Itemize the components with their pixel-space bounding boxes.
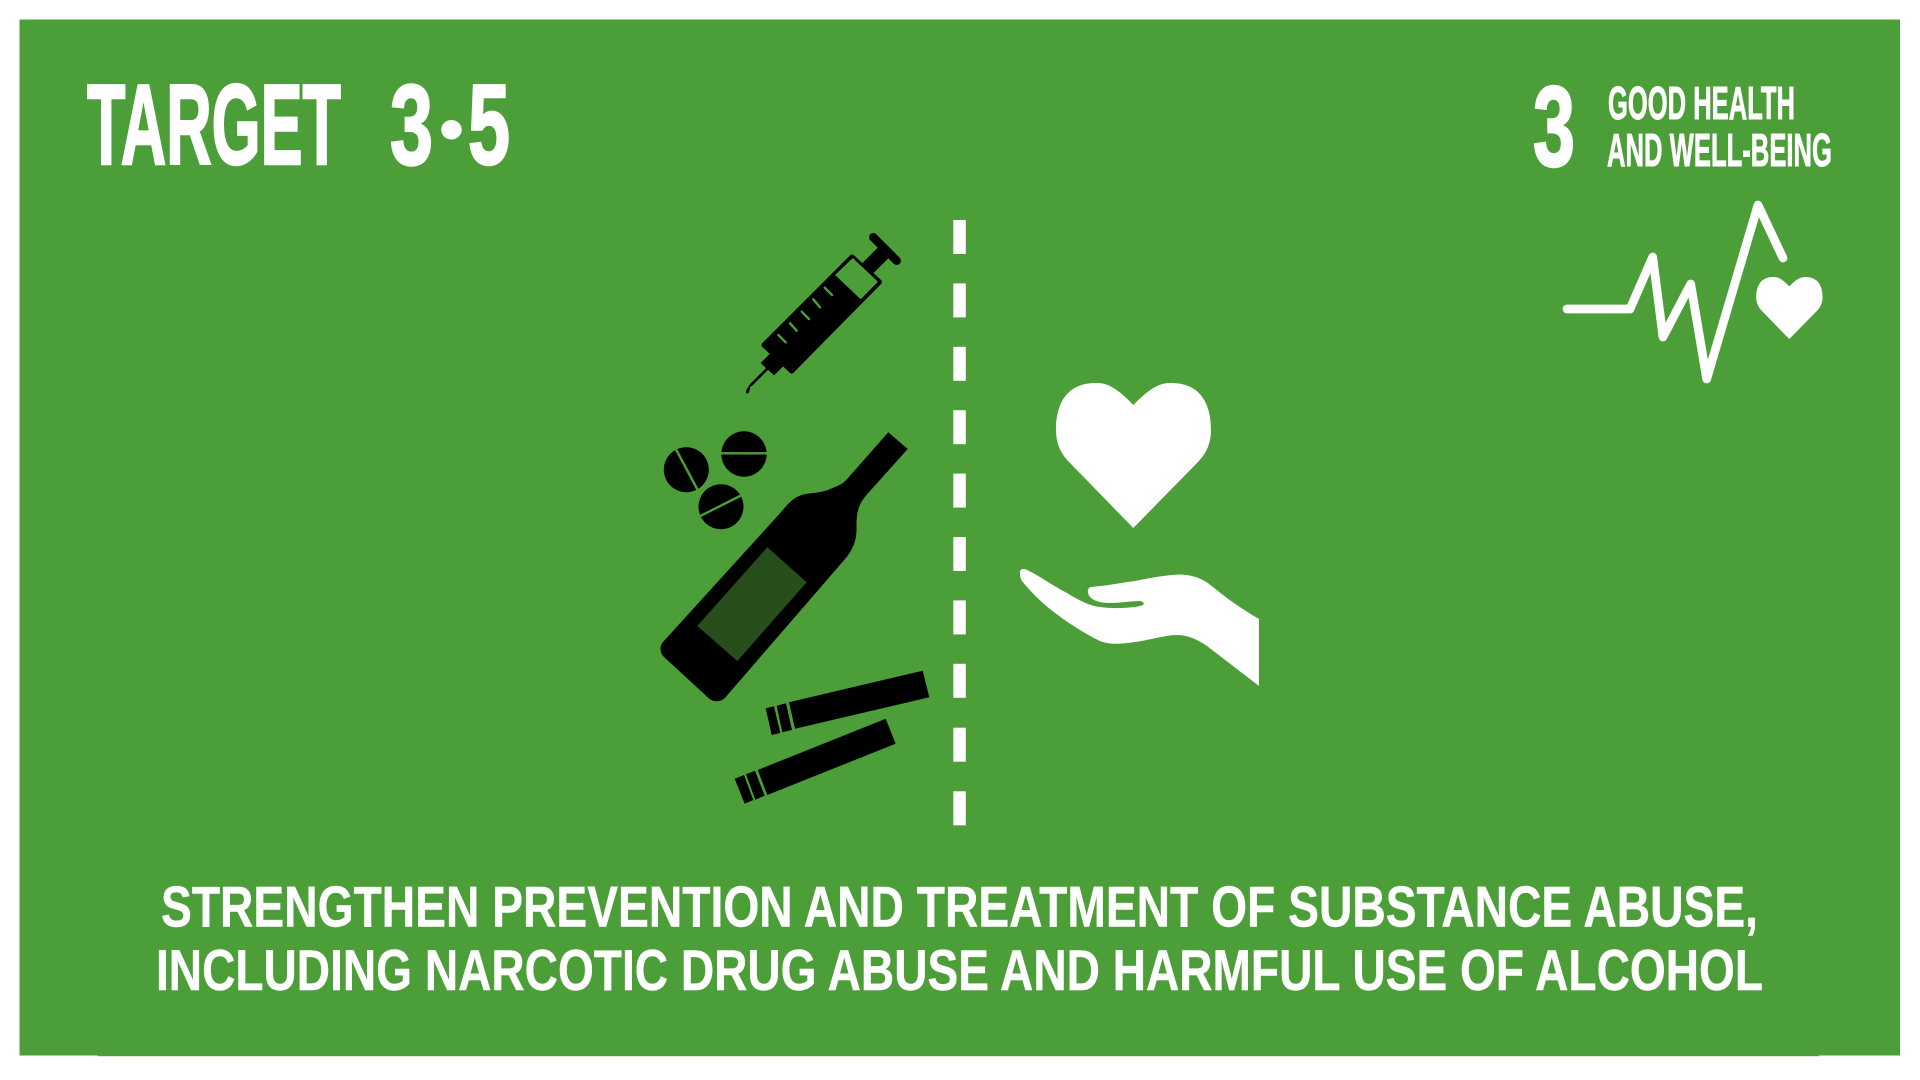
title: target number: 3 [390,62,433,189]
title: target number: • [439,91,464,167]
text: target description [156,876,1763,1003]
title: target number: 5 [468,62,510,189]
icon: alcohol bottle [660,432,908,701]
icon: open hand [1020,569,1259,686]
icon: heart [1056,383,1211,528]
icon: syringe [746,237,897,393]
icon: heartbeat line with heart [1567,205,1823,379]
icon: cigarettes [735,671,929,804]
heading: goal name [1607,77,1832,176]
divider: dashed line [953,220,966,825]
heading: goal 3 number: 3 [1533,64,1575,190]
title: target number: TARGET [87,62,341,189]
icon: pills [664,431,768,529]
